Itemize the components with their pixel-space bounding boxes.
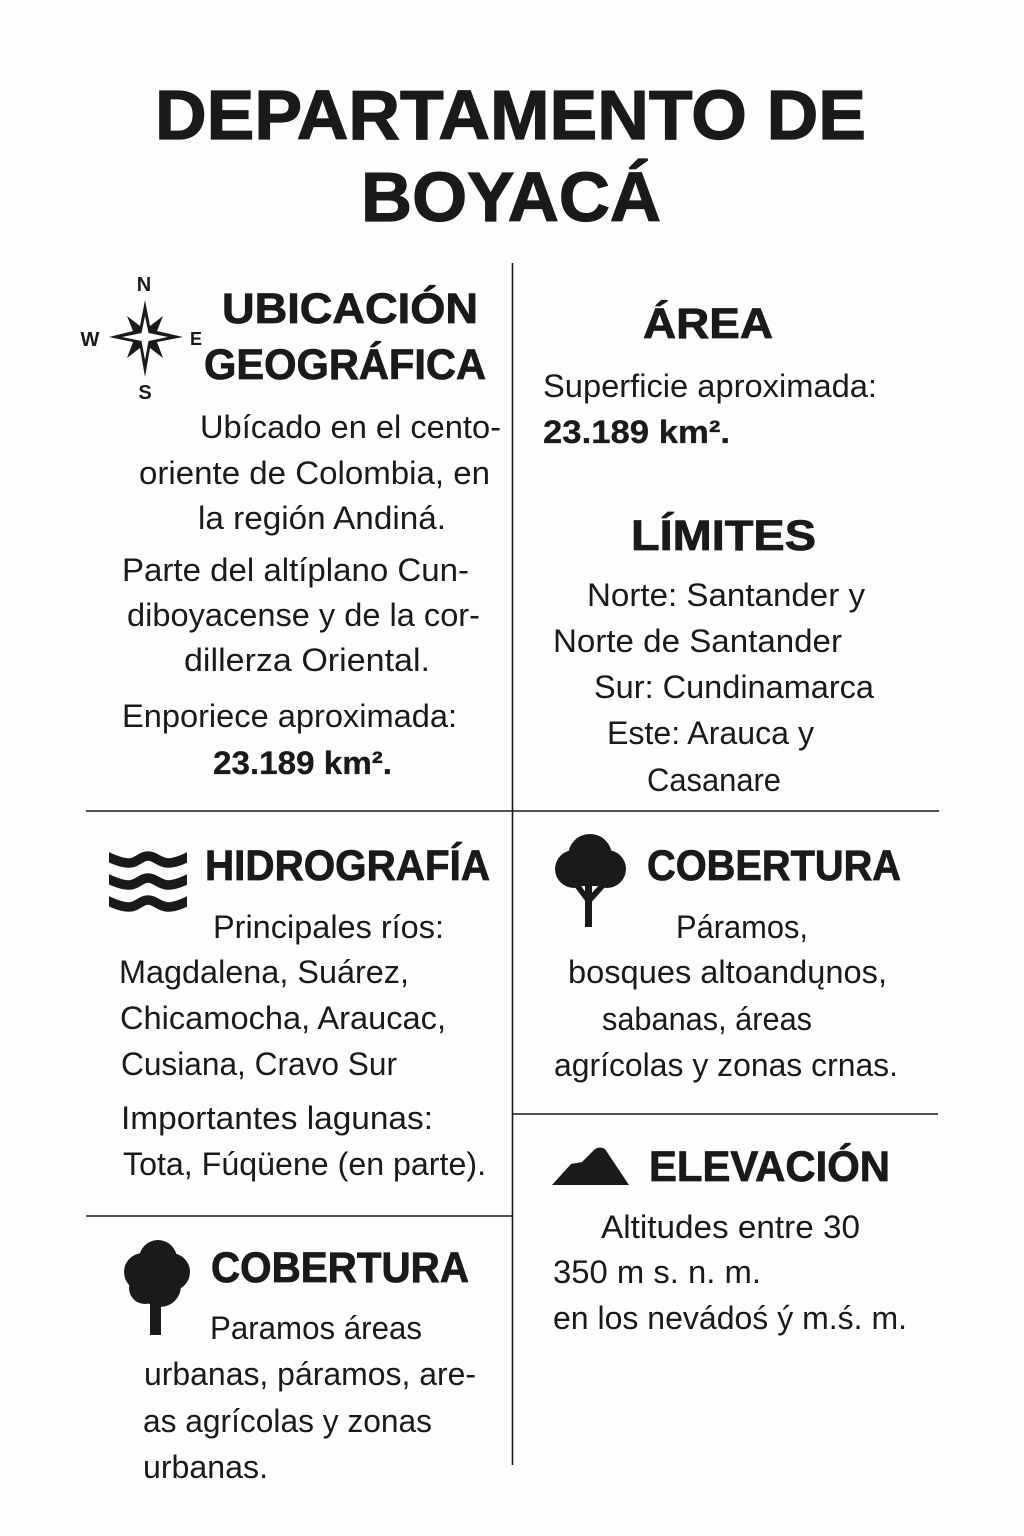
text: límites list: Casanare [647, 762, 781, 798]
heading: límites: LÍMITES [631, 512, 816, 560]
text: hidrografía description: Magdalena, Suárez, [119, 954, 409, 990]
icon: round tree [124, 1240, 190, 1335]
heading: cobertura derecha: COBERTURA [647, 842, 901, 890]
text: límites list: Norte de Santander [553, 623, 842, 659]
panel: cobertura izquierda [124, 1240, 476, 1485]
text: ubicación description: oriente de Colombia, en [139, 455, 490, 491]
text: elevación description: 350 m s. n. m. [553, 1254, 761, 1290]
text: ubicación description: Ubícado en el cento- [200, 409, 501, 445]
text: cobertura izquierda description: urbanas. [143, 1449, 268, 1485]
text: cobertura izquierda description [143, 1310, 476, 1485]
icon: compass rose [81, 274, 202, 404]
text: hidrografía description: Principales ríos: [213, 909, 444, 945]
panel: cobertura derecha [554, 834, 901, 1083]
heading: elevación: ELEVACIÓN [649, 1142, 890, 1191]
icon: compass rose: N [137, 274, 151, 296]
text: cobertura derecha description: Páramos, [676, 909, 808, 945]
text: límites list: Norte: Santander y [587, 577, 865, 613]
text: cobertura izquierda description: as agrícolas y zonas [143, 1403, 432, 1439]
text: ubicación description: diboyacense y de la cor- [127, 597, 480, 633]
text: cobertura izquierda description: urbanas, páramos, are- [144, 1356, 476, 1392]
text: área description [543, 368, 877, 450]
text: cobertura derecha description [554, 909, 898, 1083]
heading: ubicación geográfica [204, 284, 486, 389]
text: cobertura derecha description: agrícolas y zonas crnas. [554, 1047, 898, 1083]
text: cobertura izquierda description: Paramos áreas [210, 1310, 422, 1346]
icon: compass rose: E [190, 329, 202, 349]
text: límites list: Este: Arauca y [607, 715, 814, 751]
text: límites list: Sur: Cundinamarca [594, 669, 874, 705]
icon: compass rose: W [81, 329, 100, 351]
panel: hidrografía [100, 842, 490, 1182]
text: cobertura derecha description: bosques altoandųnos, [568, 954, 887, 990]
heading: ubicación geográfica: UBICACIÓN [222, 284, 478, 333]
icon: compass rose: S [138, 382, 152, 404]
text: límites list [553, 577, 874, 798]
icon: branching tree [555, 834, 626, 927]
text: área description: Superficie aproximada: [543, 368, 877, 404]
panel: límites [553, 512, 874, 798]
icon: mountain [552, 1148, 629, 1185]
text: hidrografía description: Chicamocha, Araucac, [120, 1000, 446, 1036]
text: ubicación description [122, 409, 501, 781]
title: DEPARTAMENTO DE [155, 76, 866, 154]
text: hidrografía description: Tota, Fúqüene (en parte). [123, 1146, 486, 1182]
text: elevación description [553, 1209, 907, 1336]
text: ubicación description: 23.189 km². [213, 745, 392, 781]
text: hidrografía description: Importantes lagunas: [121, 1100, 433, 1136]
text: elevación description: en los nevádoś ý m.ś. m. [553, 1300, 907, 1336]
icon: water waves [100, 853, 196, 907]
text: cobertura derecha description: sabanas, áreas [602, 1001, 812, 1037]
text: área description: 23.189 km². [543, 414, 730, 450]
text: elevación description: Altitudes entre 30 [601, 1209, 860, 1245]
title: BOYACÁ [361, 158, 661, 236]
text: ubicación description: Enporiece aproximada: [122, 698, 457, 734]
heading: ubicación geográfica: GEOGRÁFICA [204, 341, 486, 389]
text: ubicación description: Parte del altíplano Cun- [122, 552, 469, 588]
heading: área: ÁREA [643, 300, 773, 348]
panel: área [543, 300, 877, 450]
text: ubicación description: dillerza Oriental. [184, 642, 430, 678]
panel: elevación [552, 1142, 907, 1336]
text: hidrografía description: Cusiana, Cravo Sur [121, 1046, 397, 1082]
text: ubicación description: la región Andiná. [198, 500, 446, 536]
panel: ubicación geográfica [81, 274, 501, 781]
text: hidrografía description [119, 909, 486, 1182]
heading: cobertura izquierda: COBERTURA [211, 1244, 469, 1292]
heading: hidrografía: HIDROGRAFÍA [205, 842, 490, 890]
title [155, 76, 866, 236]
